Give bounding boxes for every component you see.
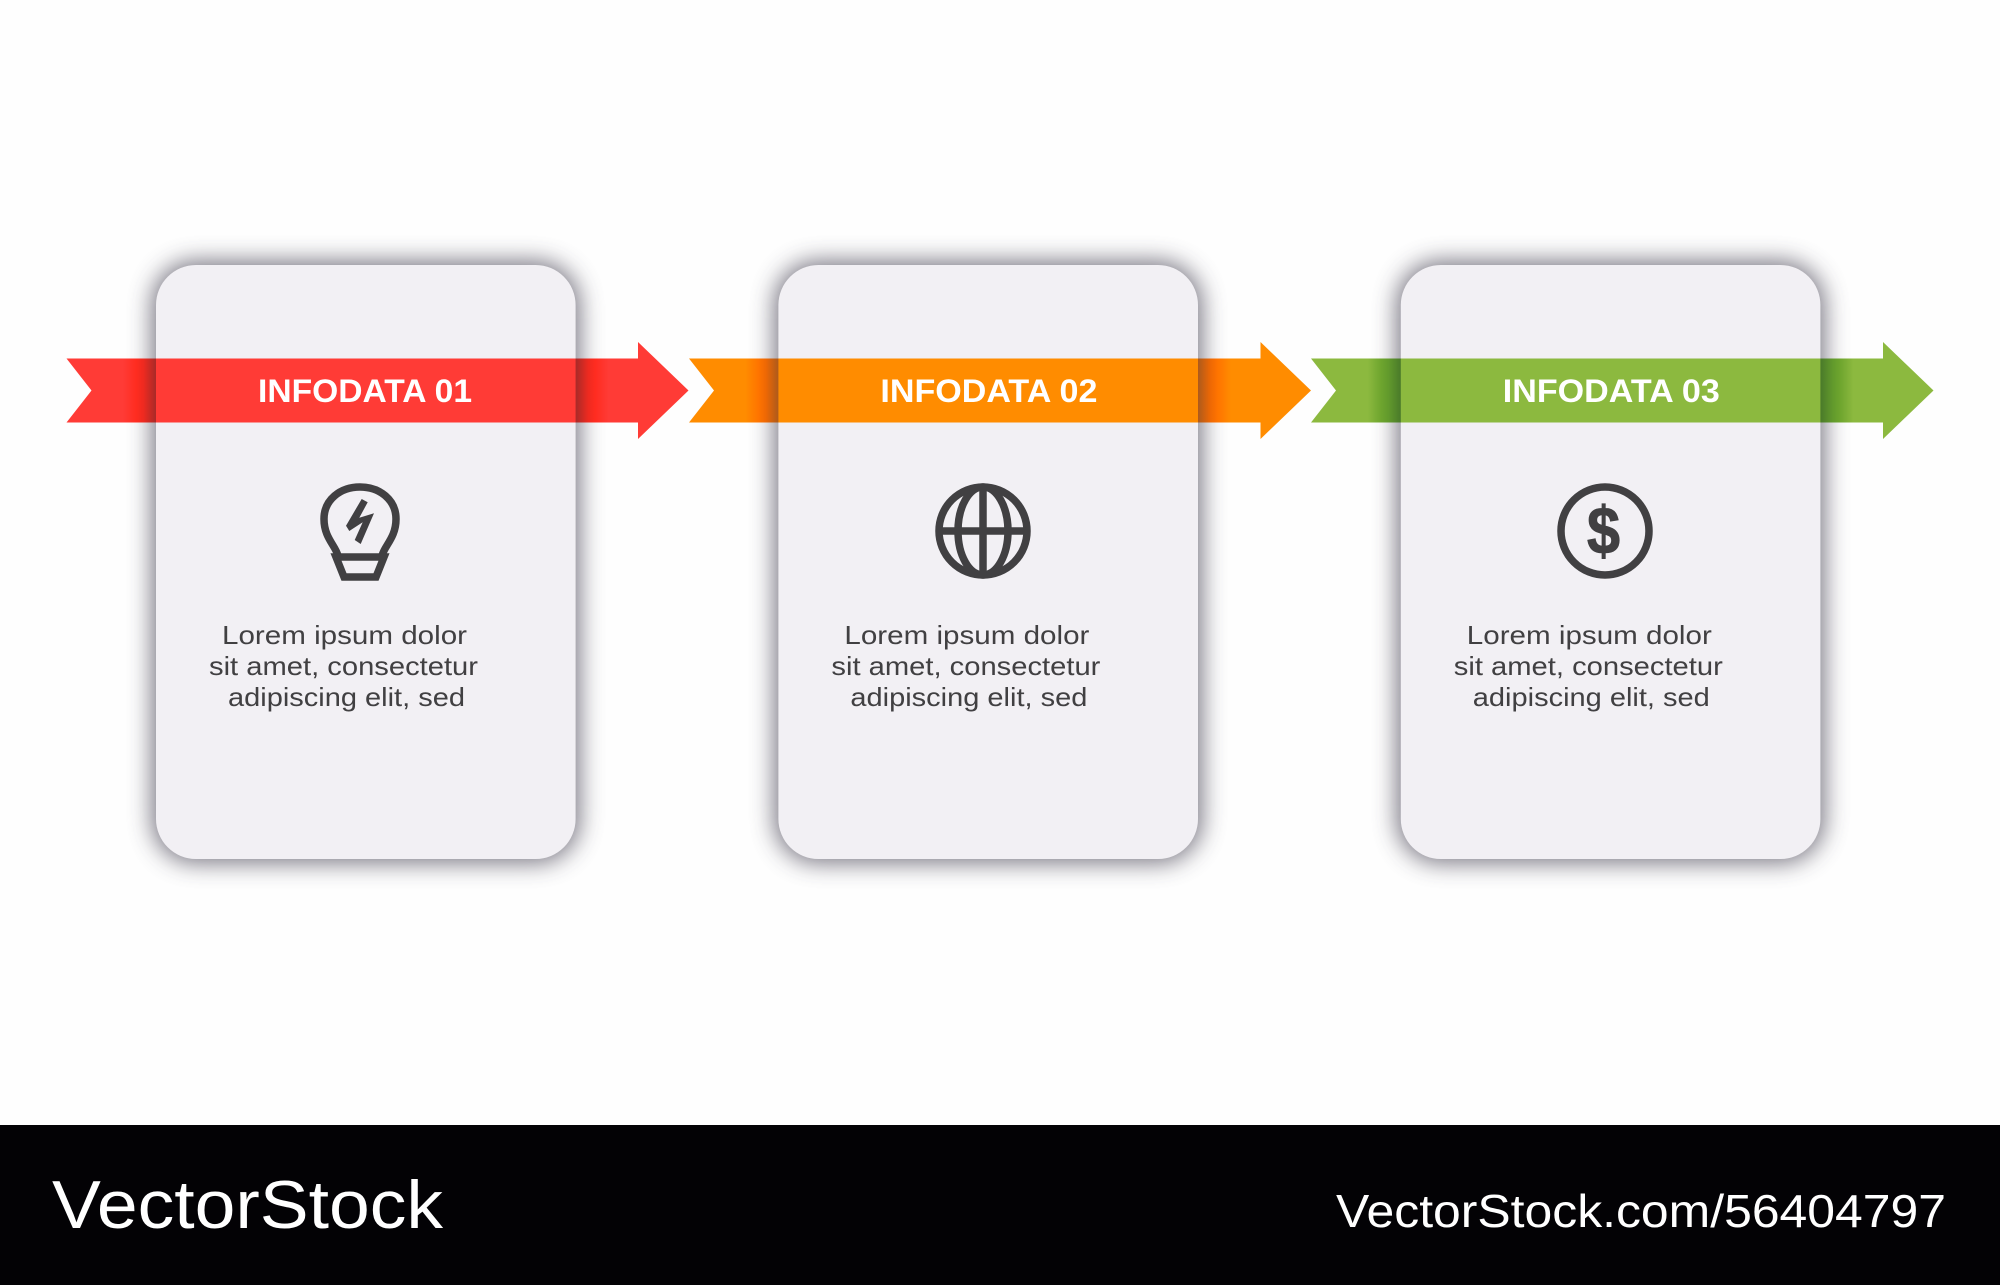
description: [1454, 620, 1723, 712]
panel: infodata 01: [66, 261, 688, 863]
card: [1401, 265, 1820, 859]
panel: infodata 02: [689, 261, 1311, 863]
description: adipiscing elit, sed: [1473, 682, 1710, 712]
heading: INFODATA 03: [1503, 373, 1720, 409]
arrow shade right: [1820, 358, 1853, 422]
heading: INFODATA 01: [258, 373, 472, 409]
icon: dollar coin: $: [1587, 494, 1620, 568]
arrow shade right: [576, 358, 609, 422]
arrow shade left: [1368, 358, 1401, 422]
description: adipiscing elit, sed: [228, 682, 465, 712]
description: [209, 620, 478, 712]
card shadow: [152, 261, 580, 863]
description: Lorem ipsum dolor: [844, 620, 1090, 650]
description: sit amet, consectetur: [1454, 651, 1723, 681]
description: adipiscing elit, sed: [850, 682, 1087, 712]
description: Lorem ipsum dolor: [1467, 620, 1712, 650]
arrow: green: [1311, 342, 1934, 439]
arrow shade right: [1198, 358, 1231, 422]
description: [831, 620, 1101, 712]
card: [156, 265, 576, 859]
arrow shade left: [123, 358, 156, 422]
panel: infodata 03: [1311, 261, 1934, 863]
heading: INFODATA 02: [880, 373, 1097, 409]
description: sit amet, consectetur: [209, 651, 478, 681]
footer image id: VectorStock.com/56404797: [1336, 1185, 1946, 1237]
card shadow: [774, 261, 1202, 863]
card: [778, 265, 1198, 859]
description: sit amet, consectetur: [831, 651, 1101, 681]
icon: dollar coin: [1561, 487, 1649, 575]
card shadow: [1397, 261, 1824, 863]
footer bar: [0, 1125, 2000, 1285]
arrow: orange: [689, 342, 1311, 439]
arrow shade left: [745, 358, 778, 422]
description: Lorem ipsum dolor: [222, 620, 467, 650]
footer logo: VectorStock: [52, 1167, 444, 1243]
arrow: red: [66, 342, 688, 439]
icon: globe: [939, 487, 1027, 575]
icon: light bulb: [324, 487, 396, 577]
lightning bolt: [346, 499, 374, 544]
